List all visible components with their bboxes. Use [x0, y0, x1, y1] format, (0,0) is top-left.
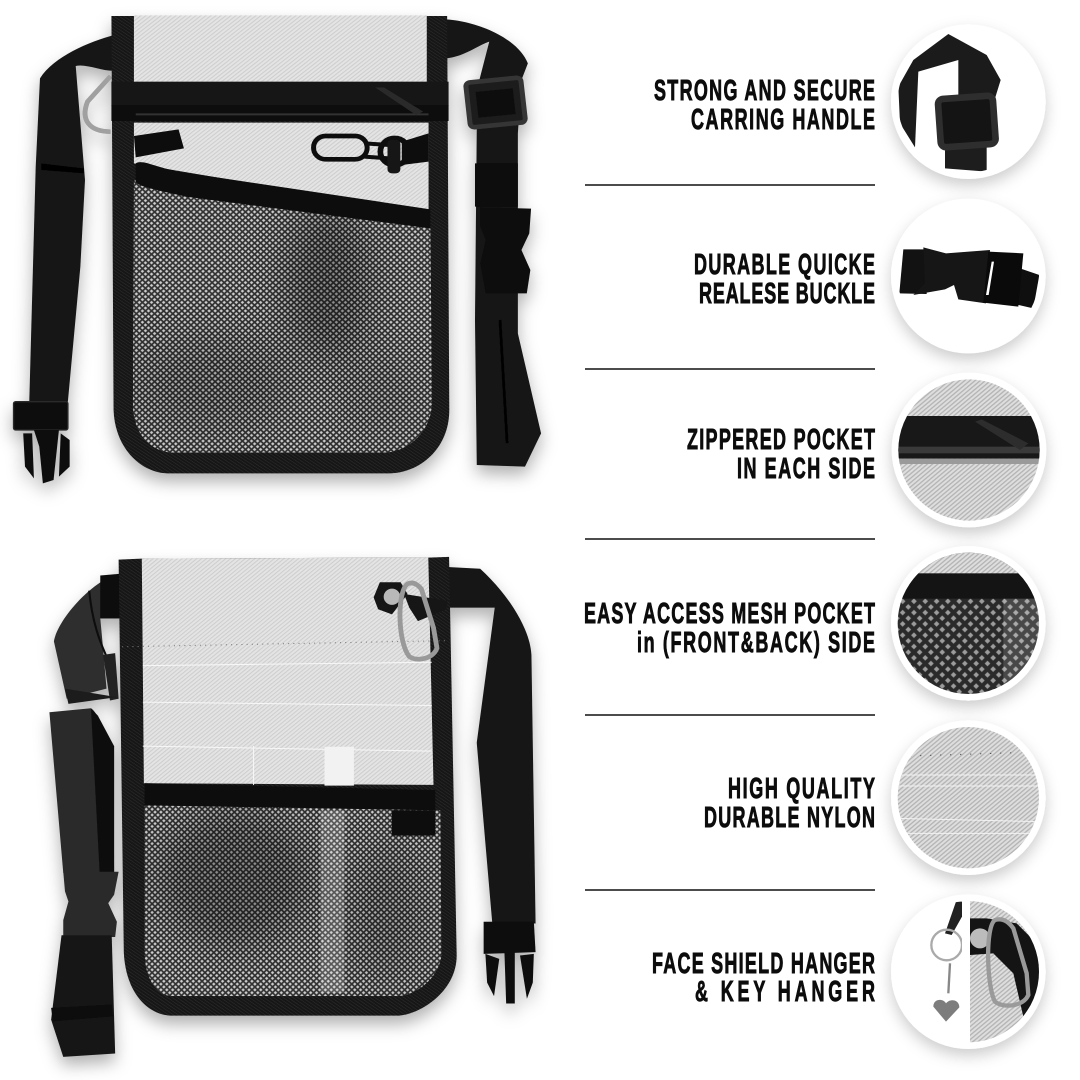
feature 2: quick release buckle	[694, 199, 1046, 353]
pouch body outline	[111, 16, 449, 473]
stitch lines	[122, 641, 446, 786]
right strap with buckle	[447, 567, 536, 1004]
heading text: IN EACH SIDE	[737, 453, 875, 485]
heading text: EASY ACCESS MESH POCKET	[584, 598, 875, 630]
mesh pocket	[129, 177, 439, 457]
right strap with slider and buckle	[446, 19, 541, 467]
circle image: strap and slider	[891, 24, 1046, 179]
feature 1: carrying handle	[654, 24, 1046, 179]
heading text: HIGH QUALITY	[728, 773, 875, 805]
product photo: pouch front view	[14, 15, 541, 483]
feature 6: face shield and key hanger	[652, 894, 1046, 1049]
heading text	[654, 75, 875, 136]
left upper strap with slider	[54, 574, 120, 704]
circle image: mesh closeup	[891, 546, 1046, 701]
heading text	[704, 773, 875, 834]
icon: snap and carabiner	[374, 582, 447, 659]
mesh pocket	[141, 804, 446, 999]
heading text: REALESE BUCKLE	[699, 278, 875, 310]
feature 3: zippered pocket	[687, 373, 1046, 527]
pouch body outline	[119, 557, 457, 1016]
left lower strap with buckle	[49, 708, 119, 1057]
heading text: CARRING HANDLE	[691, 104, 875, 136]
heading text: STRONG AND SECURE	[654, 75, 875, 107]
heading text	[584, 598, 875, 659]
slanted zipper binding	[136, 162, 430, 228]
feature 4: mesh pocket	[584, 546, 1046, 701]
left strap with buckle	[14, 35, 114, 483]
heading text	[652, 948, 875, 1008]
product photo: pouch back view	[49, 557, 536, 1057]
heading text	[694, 249, 875, 310]
heading text: & KEY HANGER	[695, 976, 875, 1008]
fabric panel	[142, 558, 433, 785]
heading text	[687, 424, 875, 485]
feature 5: durable nylon	[704, 720, 1046, 875]
heading text: ZIPPERED POCKET	[687, 424, 875, 456]
middle fabric pocket	[134, 123, 429, 213]
icon: carabiner behind strap	[85, 76, 111, 132]
zipper band	[111, 82, 449, 121]
tab	[392, 810, 435, 836]
circle image: buckle	[891, 199, 1046, 353]
heading text: in (FRONT&BACK) SIDE	[637, 627, 875, 659]
circle image: key ring and carabiner	[891, 894, 1046, 1049]
top fabric panel	[134, 15, 427, 84]
circle image: nylon fabric	[891, 720, 1046, 875]
circle image: zipper closeup	[892, 373, 1046, 527]
heading text: DURABLE QUICKE	[694, 249, 875, 281]
small tab	[134, 129, 184, 157]
heading text: DURABLE NYLON	[704, 802, 875, 834]
pocket binding band	[145, 783, 435, 810]
icon: swivel hook clip	[314, 133, 429, 173]
heading text: FACE SHIELD HANGER	[652, 948, 875, 980]
